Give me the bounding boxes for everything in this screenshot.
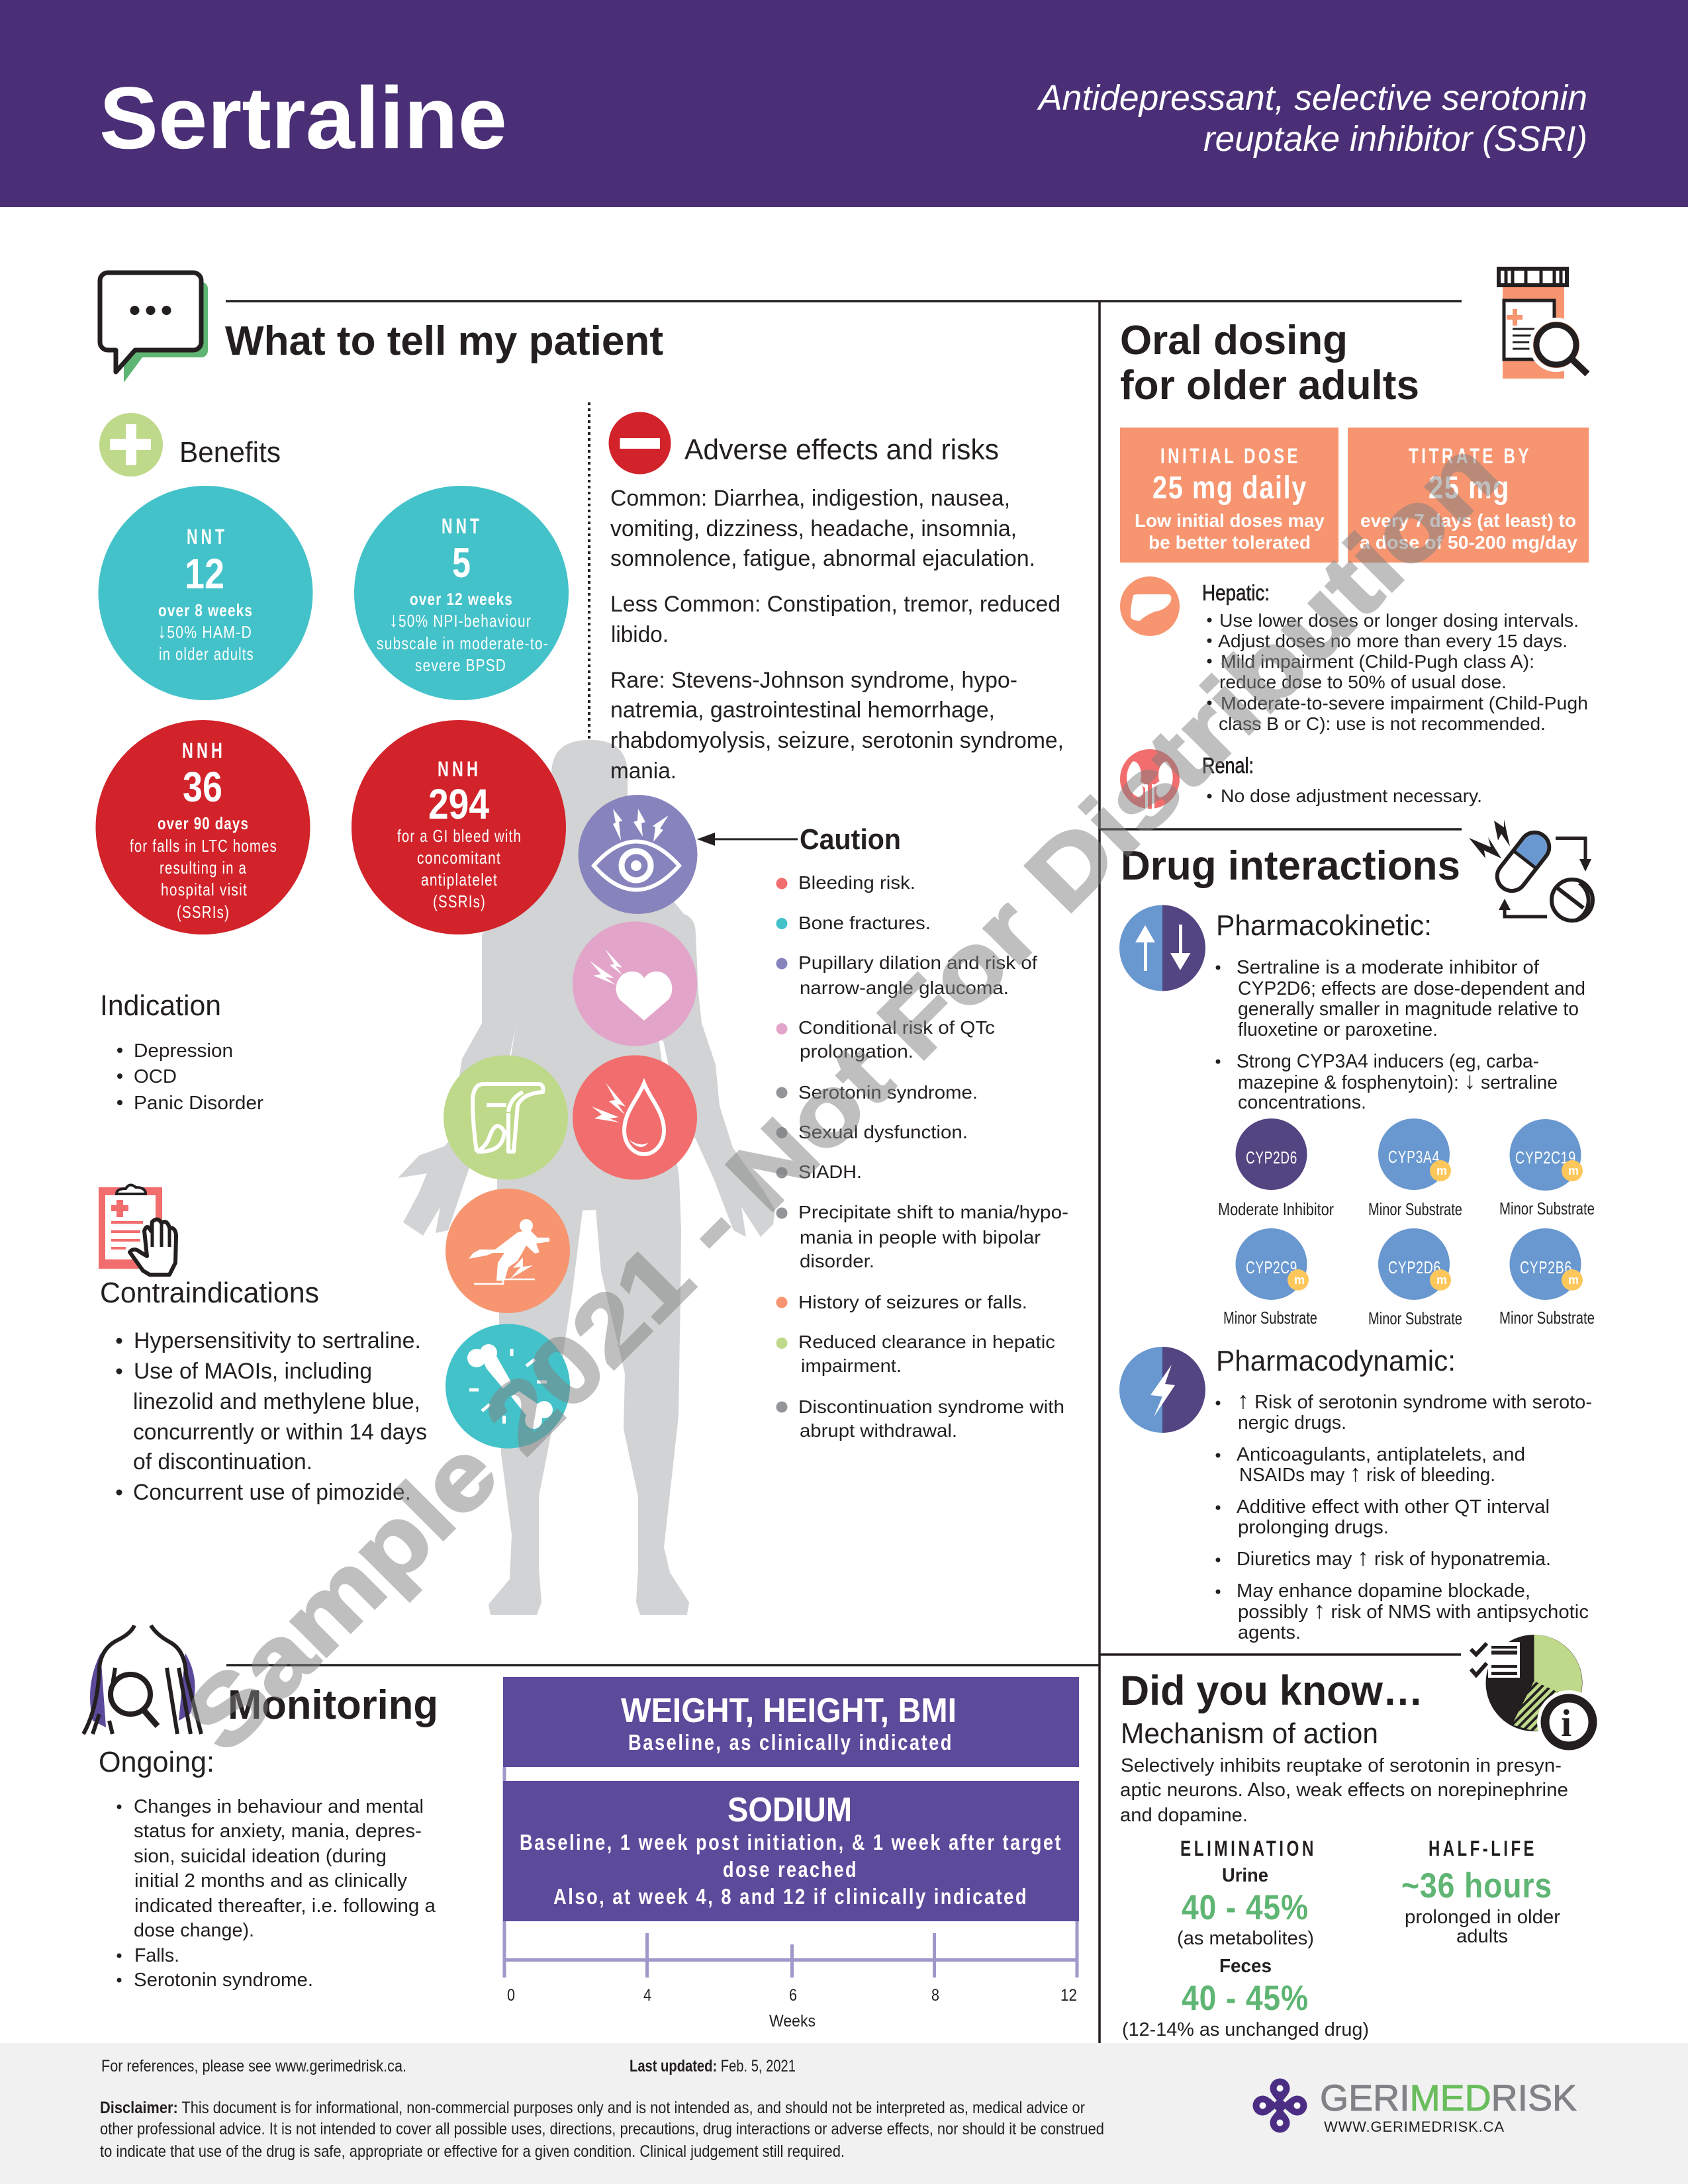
hepatic text: reduce dose to 50% of usual dose. (1219, 672, 1507, 692)
mechanism text: aptic neurons. Also, weak effects on norepinephrine (1120, 1780, 1568, 1801)
CYP enzyme grid: CYP2C19 (1515, 1148, 1576, 1167)
indication list: Depression (134, 1040, 233, 1062)
timeline axis (504, 1767, 1077, 2030)
panel: did you know (1120, 1635, 1601, 2040)
pharmacodynamic list: May enhance dopamine blockade, (1237, 1580, 1530, 1602)
oral dosing heading: for older adults (1120, 363, 1419, 408)
CYP enzyme grid: Minor Substrate (1499, 1199, 1595, 1218)
indication list: Panic Disorder (134, 1093, 263, 1114)
stat: NNH 36: (SSRIs) (177, 902, 230, 922)
adverse heading: Adverse effects and risks (684, 433, 999, 466)
timeline axis: 12 (1060, 1986, 1077, 2005)
timeline axis: Weeks (769, 2012, 816, 2030)
icon: chart with info (1471, 1635, 1601, 1754)
logo: GERIMEDRISK (1320, 2077, 1577, 2118)
section rules (226, 301, 1462, 2043)
pharmacokinetic list: mazepine & fosphenytoin): ↓ sertraline (1238, 1067, 1558, 1094)
CYP enzyme grid: CYP3A4 (1388, 1147, 1440, 1167)
adverse text: libido. (611, 622, 669, 647)
half-life (1401, 1837, 1560, 1947)
box: weight height BMI: WEIGHT, HEIGHT, BMI (621, 1692, 957, 1730)
watermark: Sample 2021 - Not For Distribution (165, 420, 1518, 1772)
pharmacodynamic list: Diuretics may ↑ risk of hyponatremia. (1237, 1543, 1551, 1570)
caution bullets: History of seizures or falls. (798, 1292, 1027, 1312)
mechanism text: Selectively inhibits reuptake of serotonin in presyn- (1121, 1755, 1562, 1776)
caution bullets: Reduced clearance in hepatic (798, 1332, 1055, 1352)
ongoing list: sion, suicidal ideation (during (134, 1846, 387, 1867)
box: sodium: SODIUM (727, 1791, 852, 1829)
timeline axis: 6 (789, 1986, 797, 2005)
benefits heading: Benefits (179, 436, 281, 469)
CYP enzyme grid: m (1436, 1273, 1447, 1287)
adverse text: somnolence, fatigue, abnormal ejaculation. (610, 546, 1035, 571)
icon: broken bone (445, 1324, 570, 1448)
references: For references, please see www.gerimedrisk.ca. (101, 2057, 406, 2075)
last updated: Last updated: Feb. 5, 2021 (630, 2057, 796, 2075)
panel: benefits (98, 413, 569, 700)
panel: contraindications (99, 1185, 427, 1505)
subtitle: reuptake inhibitor (SSRI) (1203, 119, 1587, 159)
CYP enzyme grid: CYP2D6 (1246, 1148, 1297, 1167)
mechanism text: and dopamine. (1120, 1805, 1248, 1826)
CYP enzyme grid: m (1294, 1273, 1305, 1287)
pharmacokinetic list: Strong CYP3A4 inducers (eg, carba- (1237, 1051, 1539, 1072)
caution bullets (776, 872, 1068, 1441)
caution bullets: prolongation. (800, 1041, 914, 1062)
stat: NNH 36: 36 (183, 763, 222, 811)
icon: kidneys (1120, 749, 1180, 809)
stat: NNH 294 (352, 720, 566, 934)
contraindications list: of discontinuation. (133, 1449, 312, 1475)
CYP enzyme grid: CYP2D6 (1388, 1257, 1441, 1277)
elimination: Urine (1222, 1865, 1268, 1886)
pharmacodynamic list: Anticoagulants, antiplatelets, and (1237, 1444, 1525, 1465)
ongoing list: dose change). (134, 1920, 254, 1941)
mechanism heading: Mechanism of action (1121, 1717, 1378, 1750)
drug interactions heading: Drug interactions (1121, 843, 1460, 889)
CYP enzyme grid: Minor Substrate (1499, 1308, 1595, 1328)
stat: NNH 294: antiplatelet (421, 870, 498, 889)
panel: harm stats (95, 720, 566, 934)
box: initial dose: INITIAL DOSE (1160, 444, 1301, 468)
icon: liver (444, 1055, 568, 1179)
panel: indication (100, 989, 263, 1114)
adverse text: rhabdomyolysis, seizure, serotonin syndrome, (610, 728, 1064, 753)
ongoing list (117, 1796, 436, 1991)
stat: NNT 5: over 12 weeks (410, 589, 513, 609)
stat: NNH 36: NNH (182, 739, 226, 762)
timeline axis: 0 (507, 1986, 515, 2005)
icon: plus (99, 413, 163, 477)
icon: clipboard with hand (99, 1185, 176, 1275)
box: titrate by: 25 mg (1429, 471, 1510, 506)
disclaimer: Disclaimer: This document is for informational, non-commercial purposes only and is not intended as, and should not be interpreted as, medical advice or (100, 2099, 1085, 2117)
hepatic text: Moderate-to-severe impairment (Child-Pugh (1221, 693, 1588, 713)
ongoing list: status for anxiety, mania, depres- (134, 1821, 422, 1842)
CYP enzyme grid: CYP2C9 (1246, 1257, 1297, 1277)
panel: adverse effects and risks (609, 412, 1064, 784)
box: titrate by: every 7 days (at least) to (1360, 510, 1576, 531)
CYP enzyme grid: m (1436, 1164, 1447, 1177)
renal text (1202, 753, 1482, 806)
stat: NNH 294: NNH (438, 757, 481, 781)
half-life: adults (1456, 1926, 1508, 1947)
stat: NNT 12: NNT (187, 525, 228, 549)
panel: oral dosing (1120, 269, 1589, 809)
caution bullets: impairment. (801, 1355, 902, 1376)
CYP enzyme grid: Minor Substrate (1368, 1199, 1462, 1219)
box: weight height BMI (503, 1677, 1079, 1767)
caution bullets: Sexual dysfunction. (798, 1122, 968, 1142)
ongoing heading: Ongoing: (99, 1746, 214, 1778)
disclaimer: to indicate that use of the drug is safe, appropriate or effective for a given condition. Clinical judgement still required. (100, 2142, 845, 2161)
indication list (117, 1040, 263, 1114)
elimination: 40 - 45% (1182, 1979, 1309, 2018)
elimination: ELIMINATION (1180, 1837, 1317, 1860)
hepatic text: class B or C): use is not recommended. (1219, 713, 1546, 734)
caution bullets: Precipitate shift to mania/hypo- (798, 1202, 1068, 1222)
contraindications list: linezolid and methylene blue, (133, 1389, 420, 1414)
ongoing list: indicated thereafter, i.e. following a (134, 1895, 436, 1917)
timeline axis: 8 (931, 1986, 939, 2005)
contraindications list: Concurrent use of pimozide. (133, 1480, 411, 1505)
box: titrate by: a dose of 50-200 mg/day (1360, 532, 1577, 553)
stat: NNH 36: resulting in a (160, 858, 247, 878)
caution bullets: SIADH. (798, 1161, 862, 1182)
oral dosing heading: Oral dosing (1120, 318, 1348, 363)
adverse text: Common: Diarrhea, indigestion, nausea, (610, 486, 1010, 511)
pharmacodynamic heading: Pharmacodynamic: (1216, 1345, 1456, 1377)
footer (0, 2043, 1688, 2184)
pharmacokinetic list: CYP2D6; effects are dose-dependent and (1238, 978, 1585, 999)
caution bullets: mania in people with bipolar (800, 1227, 1041, 1248)
stat: NNT 12: in older adults (159, 644, 254, 664)
half-life: prolonged in older (1405, 1907, 1560, 1928)
adverse text (610, 486, 1064, 784)
icon: blood drop (573, 1055, 697, 1179)
ongoing list: Falls. (134, 1945, 179, 1966)
box: initial dose: 25 mg daily (1152, 471, 1307, 506)
pharmacokinetic list: concentrations. (1238, 1092, 1366, 1113)
stat: NNT 5: 5 (452, 539, 471, 586)
pharmacodynamic list: possibly ↑ risk of NMS with antipsychotic (1238, 1596, 1589, 1623)
stat: NNH 294: for a GI bleed with (397, 826, 522, 846)
stat: NNT 5: subscale in moderate-to- (377, 633, 549, 653)
caution bullets: narrow-angle glaucoma. (800, 978, 1009, 998)
icon: up down arrows (1119, 905, 1205, 991)
ongoing list: Changes in behaviour and mental (134, 1796, 424, 1817)
elimination: Feces (1219, 1956, 1272, 1977)
panel: caution (697, 823, 1068, 1441)
icon: pills interaction (1469, 819, 1593, 921)
icon: torso with magnifier (83, 1625, 201, 1734)
pharmacokinetic list: Sertraline is a moderate inhibitor of (1237, 957, 1540, 978)
box: sodium (503, 1781, 1079, 1921)
stat: NNH 36: for falls in LTC homes (130, 836, 277, 856)
subtitle (1037, 78, 1587, 159)
logo: WWW.GERIMEDRISK.CA (1324, 2118, 1504, 2135)
pharmacodynamic list: agents. (1238, 1622, 1301, 1643)
icon: speech bubble (100, 273, 208, 383)
heading: What to tell my patient (225, 318, 663, 364)
pharmacodynamic list: Additive effect with other QT interval (1237, 1496, 1550, 1518)
CYP enzyme grid (1218, 1118, 1595, 1328)
monitoring heading: Monitoring (228, 1682, 438, 1728)
disclaimer: other professional advice. It is not intended to cover all possible uses, directions, precautions, drug interactions or adverse effects, nor should it be construed (100, 2120, 1104, 2138)
adverse text: mania. (610, 758, 677, 784)
pharmacodynamic list: NSAIDs may ↑ risk of bleeding. (1239, 1459, 1495, 1486)
stat: NNT 5 (354, 486, 569, 700)
icon: minus (609, 412, 671, 474)
ongoing list: Serotonin syndrome. (134, 1970, 313, 1991)
half-life: HALF-LIFE (1429, 1837, 1537, 1860)
half-life: ~36 hours (1401, 1866, 1552, 1905)
disclaimer (100, 2099, 1104, 2161)
did you know heading: Did you know… (1120, 1668, 1423, 1714)
mechanism text (1120, 1755, 1568, 1826)
caution bullets: Discontinuation syndrome with (798, 1396, 1064, 1417)
renal text: Renal: (1202, 753, 1254, 778)
pharmacodynamic list: prolonging drugs. (1238, 1517, 1389, 1538)
stat: NNT 12: ↓50% HAM-D (158, 619, 252, 643)
pharmacodynamic list (1215, 1387, 1592, 1643)
stat: NNT 5: severe BPSD (415, 655, 506, 675)
CYP enzyme grid: Minor Substrate (1223, 1308, 1317, 1328)
subtitle: Antidepressant, selective serotonin (1037, 78, 1587, 118)
pharmacokinetic list: fluoxetine or paroxetine. (1238, 1019, 1438, 1040)
hepatic text: Use lower doses or longer dosing intervals. (1219, 610, 1579, 631)
elimination (1122, 1837, 1369, 2040)
box: sodium: dose reached (723, 1857, 858, 1882)
contraindications list: Hypersensitivity to sertraline. (134, 1328, 421, 1353)
icon: chart with info: i (1561, 1702, 1571, 1745)
box: titrate by: TITRATE BY (1409, 444, 1532, 468)
header banner (0, 0, 1688, 207)
caution bullets: abrupt withdrawal. (800, 1420, 957, 1441)
hepatic text (1202, 580, 1588, 734)
adverse text: vomiting, dizziness, headache, insomnia, (610, 516, 1017, 541)
elimination: (12-14% as unchanged drug) (1122, 2019, 1369, 2040)
caution bullets: disorder. (800, 1251, 874, 1271)
hepatic text: Mild impairment (Child-Pugh class A): (1221, 651, 1534, 672)
icon: bolt (1119, 1347, 1205, 1433)
CYP enzyme grid: CYP2B6 (1520, 1257, 1572, 1277)
panel: monitoring (83, 1625, 1079, 2030)
arrow (697, 833, 798, 846)
stat: NNT 12: 12 (185, 550, 224, 598)
CYP enzyme grid: m (1568, 1273, 1579, 1287)
pharmacodynamic list: nergic drugs. (1238, 1412, 1346, 1433)
renal text: No dose adjustment necessary. (1221, 786, 1482, 806)
stat: NNH 36: hospital visit (161, 880, 248, 899)
elimination: 40 - 45% (1182, 1888, 1309, 1927)
box: initial dose: Low initial doses may (1135, 510, 1325, 531)
stat: NNT 5: NNT (442, 514, 483, 538)
body silhouette (398, 740, 775, 1615)
stat: NNT 5: ↓50% NPI-behaviour (389, 608, 532, 631)
pharmacokinetic heading: Pharmacokinetic: (1216, 909, 1432, 942)
stat: NNT 12: over 8 weeks (158, 600, 253, 620)
hepatic text: Hepatic: (1202, 580, 1270, 605)
stat: NNT 12 (98, 486, 312, 700)
stat: NNH 36: over 90 days (158, 813, 249, 833)
adverse text: Rare: Stevens-Johnson syndrome, hypo- (610, 668, 1017, 693)
icon: liver (1120, 576, 1180, 636)
pharmacokinetic list: generally smaller in magnitude relative to (1238, 999, 1579, 1020)
icon: eye (579, 795, 698, 914)
box: sodium: Also, at week 4, 8 and 12 if clinically indicated (553, 1884, 1028, 1909)
icon: pill bottle (1499, 269, 1587, 379)
ongoing list: initial 2 months and as clinically (134, 1870, 407, 1891)
contraindications heading: Contraindications (100, 1277, 319, 1309)
stat: NNH 294: concomitant (417, 848, 501, 868)
timeline axis: 4 (643, 1986, 651, 2005)
panel: drug interactions (1119, 819, 1595, 1643)
logo (1252, 2077, 1577, 2135)
box: initial dose: be better tolerated (1149, 532, 1311, 553)
adverse text: Less Common: Constipation, tremor, reduced (610, 592, 1060, 617)
caution bullets: Bone fractures. (798, 913, 931, 933)
stat: NNH 294: 294 (428, 780, 489, 828)
caution bullets: Pupillary dilation and risk of (798, 952, 1037, 973)
contraindications list: concurrently or within 14 days (133, 1420, 427, 1445)
pharmacodynamic list: ↑ Risk of serotonin syndrome with seroto- (1237, 1387, 1592, 1414)
oral dosing heading (1120, 318, 1419, 408)
box: sodium: Baseline, 1 week post initiation, & 1 week after target (520, 1830, 1062, 1854)
caution bullets: Bleeding risk. (798, 872, 915, 893)
box: titrate by (1348, 428, 1589, 563)
hepatic text: Adjust doses no more than every 15 days. (1218, 631, 1568, 651)
pharmacokinetic list (1215, 957, 1585, 1113)
caution bullets: Serotonin syndrome. (798, 1082, 978, 1103)
adverse text: natremia, gastrointestinal hemorrhage, (610, 698, 995, 723)
CYP enzyme grid: m (1568, 1164, 1579, 1177)
stat: NNH 294: (SSRIs) (433, 891, 486, 911)
section: what to tell my patient (100, 273, 663, 383)
stat: NNH 36 (95, 720, 310, 934)
box: weight height BMI: Baseline, as clinically indicated (628, 1730, 953, 1754)
CYP enzyme grid: Moderate Inhibitor (1218, 1199, 1334, 1219)
caution heading: Caution (800, 823, 901, 856)
box: initial dose (1120, 428, 1338, 563)
indication list: OCD (134, 1066, 177, 1087)
contraindications list: Use of MAOIs, including (134, 1359, 372, 1384)
elimination: (as metabolites) (1177, 1928, 1314, 1949)
CYP enzyme grid: Minor Substrate (1368, 1308, 1462, 1328)
icon: heart (573, 921, 697, 1046)
caution bullets: Conditional risk of QTc (798, 1017, 995, 1038)
indication heading: Indication (100, 989, 221, 1022)
title: Sertraline (99, 69, 507, 167)
contraindications list (117, 1328, 427, 1505)
icon: fall (445, 1189, 570, 1313)
